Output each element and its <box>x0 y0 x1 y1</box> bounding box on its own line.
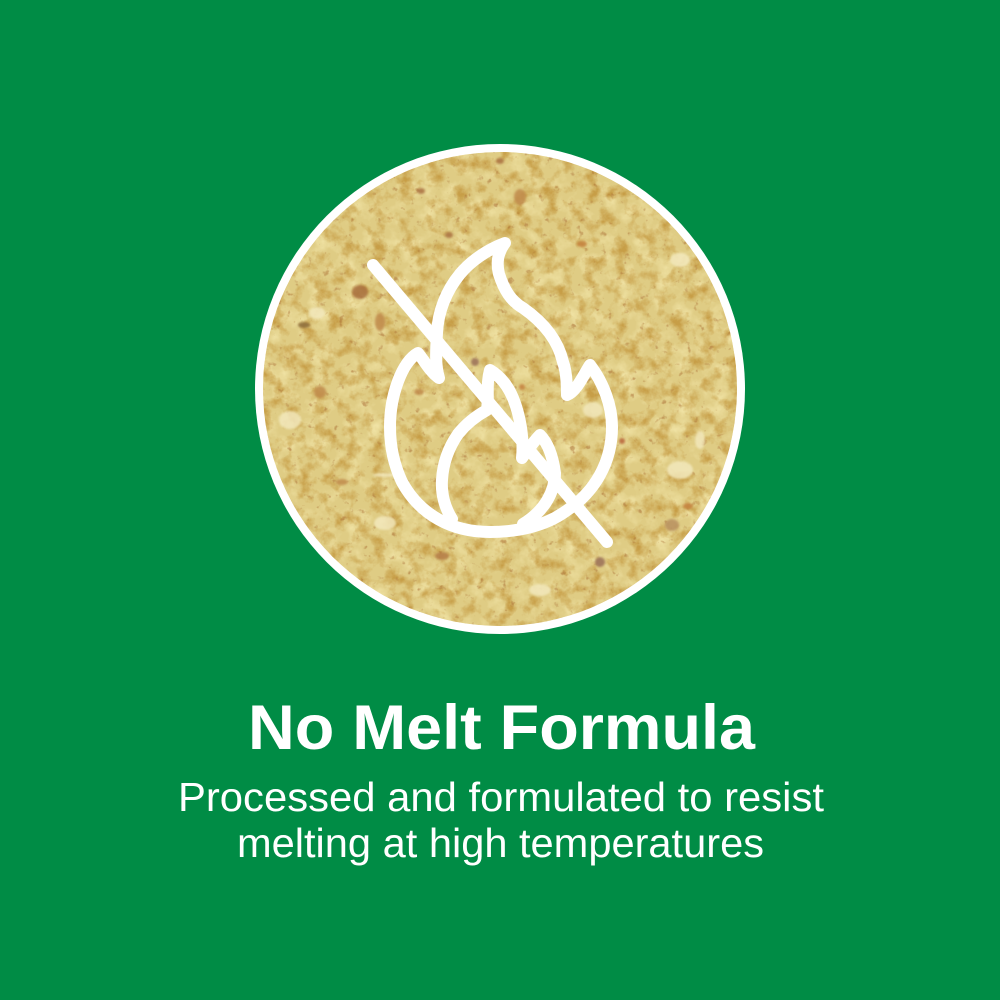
circular ingredient panel <box>255 144 745 634</box>
description line 2: melting at high temperatures <box>237 820 764 866</box>
description line 1: Processed and formulated to resist <box>178 774 825 820</box>
inner flame outline <box>442 370 555 524</box>
crumb texture disc <box>263 152 737 626</box>
icon: crossed-out flame <box>373 243 612 542</box>
outer flame outline <box>390 243 612 532</box>
title: No Melt Formula <box>248 693 756 763</box>
slash line <box>373 265 607 542</box>
white circle ring <box>255 144 745 634</box>
description text <box>178 774 825 866</box>
